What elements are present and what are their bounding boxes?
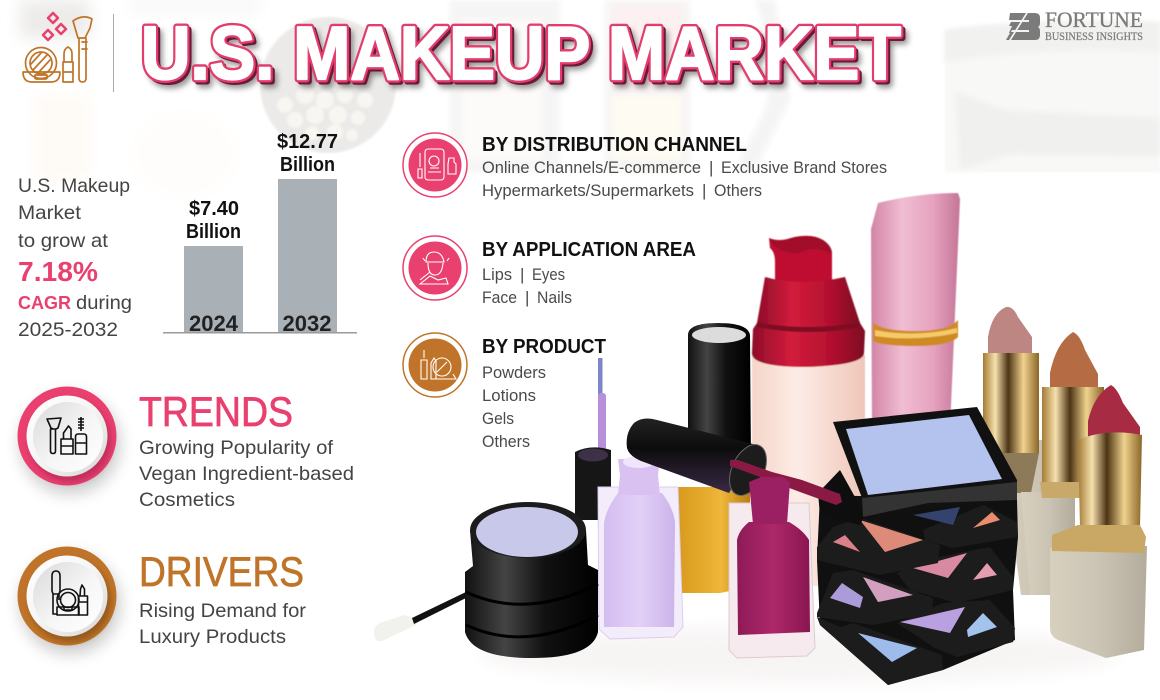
value: 2032 <box>277 131 338 176</box>
product photo illustration <box>374 193 1147 685</box>
icon: drivers badge <box>18 546 120 654</box>
application area list: Nails <box>537 288 572 307</box>
heading: trends: TRENDS <box>139 388 293 435</box>
heading: by distribution channel: BY DISTRIBUTION CHANNEL <box>482 133 747 156</box>
header divider <box>113 14 114 92</box>
drivers text <box>139 600 307 648</box>
application area list: Face <box>482 288 517 307</box>
compact: second left <box>817 518 940 575</box>
compact: bottom right <box>897 600 1015 657</box>
yellow polish bottle <box>678 487 750 593</box>
distribution channel list: Online Channels/E-commerce <box>482 158 701 177</box>
compact: third left <box>817 570 933 625</box>
header icon: compact, lipstick, brush <box>23 13 92 82</box>
trends text <box>139 437 354 511</box>
panel: by application area <box>403 236 696 307</box>
product list <box>482 363 546 451</box>
value: 2032: $12.77 <box>277 131 338 153</box>
right lipsticks <box>983 307 1147 658</box>
CAGR text block <box>18 175 132 341</box>
compact: second right <box>923 505 1018 548</box>
distribution channel list: Exclusive Brand Stores <box>721 158 887 177</box>
black cap <box>688 323 751 460</box>
panel: by product <box>403 333 606 451</box>
product list: Others <box>482 432 530 451</box>
logo: Fortune Business Insights: BUSINESS INSIGHTS <box>1045 31 1143 43</box>
foundation bottle <box>752 236 865 586</box>
value: 2024 <box>186 198 241 243</box>
application area list: Lips <box>482 265 512 284</box>
title: U.S. MAKEUP MARKET <box>141 11 901 95</box>
distribution channel list: Hypermarkets/Supermarkets <box>482 181 694 200</box>
lipstick: rose <box>983 307 1075 595</box>
lavender nail polish bottle <box>598 456 683 639</box>
product list: Powders <box>482 363 546 382</box>
title: U.S. MAKEUP MARKET <box>146 17 906 101</box>
heading: drivers: DRIVERS <box>139 548 304 595</box>
CAGR text block: CAGR <box>18 292 71 313</box>
trends text: Growing Popularity of <box>139 437 334 459</box>
icon: woman applying makeup <box>403 236 467 300</box>
distribution channel list: | <box>702 181 706 200</box>
compact: bottom left <box>817 617 943 685</box>
trends text: Cosmetics <box>139 489 235 511</box>
drivers text: Luxury Products <box>139 626 286 648</box>
distribution channel list: | <box>709 158 713 177</box>
icon: cosmetics set <box>403 333 467 397</box>
application area list: Eyes <box>532 265 565 284</box>
application area list: | <box>520 265 524 284</box>
magenta nail polish bottle <box>729 477 815 658</box>
trends text: Vegan Ingredient-based <box>139 463 354 485</box>
lavender polish brush <box>575 358 611 520</box>
lipstick: copper <box>1021 332 1104 595</box>
compact: left backing <box>818 470 865 525</box>
CAGR text block: 2025-2032 <box>18 319 118 341</box>
stack backing <box>817 495 1018 685</box>
lipstick: berry <box>1050 385 1147 658</box>
logo: Fortune Business Insights: FORTUNE <box>1045 7 1143 32</box>
icon: trends badge <box>18 386 120 494</box>
bar: 2032 <box>278 179 337 333</box>
black cap with magenta brush <box>627 419 842 505</box>
year labels <box>189 311 331 336</box>
bar chart: market size <box>163 131 357 336</box>
application area list: | <box>525 288 529 307</box>
distribution channel list: Others <box>714 181 762 200</box>
product list: Lotions <box>482 386 536 405</box>
soft floor shadow <box>480 627 1120 683</box>
drivers text: Rising Demand for <box>139 600 307 622</box>
title: U.S. MAKEUP MARKET <box>144 14 904 98</box>
panel: trends <box>18 386 354 511</box>
icon: mobile beauty <box>403 133 467 197</box>
CAGR text block: Market <box>18 202 82 224</box>
compact: third right <box>897 547 1013 603</box>
panel: drivers <box>18 546 307 654</box>
value: 2032: Billion <box>280 154 335 176</box>
distribution channel list <box>482 158 887 200</box>
CAGR text block: U.S. Makeup <box>18 175 130 197</box>
bar: 2024 <box>184 246 243 333</box>
panel: by distribution channel <box>403 133 887 200</box>
CAGR text block: 7.18% <box>18 256 98 287</box>
CAGR text block: to grow at <box>18 230 109 252</box>
pink lipstick tube <box>871 193 960 429</box>
application area list <box>482 265 572 307</box>
year labels: 2032 <box>283 311 331 336</box>
heading: by product: BY PRODUCT <box>482 335 606 358</box>
value: 2024: Billion <box>186 221 241 243</box>
CAGR text block: during <box>76 292 132 314</box>
product list: Gels <box>482 409 514 428</box>
logo: Fortune Business Insights <box>1006 7 1143 43</box>
powder jar <box>374 502 598 658</box>
compact: top <box>833 407 1017 517</box>
year labels: 2024 <box>189 311 239 336</box>
value: 2024: $7.40 <box>189 198 239 220</box>
eyeshadow compact stack <box>817 407 1018 685</box>
heading: by application area: BY APPLICATION AREA <box>482 238 696 261</box>
title: U.S. MAKEUP MARKET <box>141 11 901 95</box>
